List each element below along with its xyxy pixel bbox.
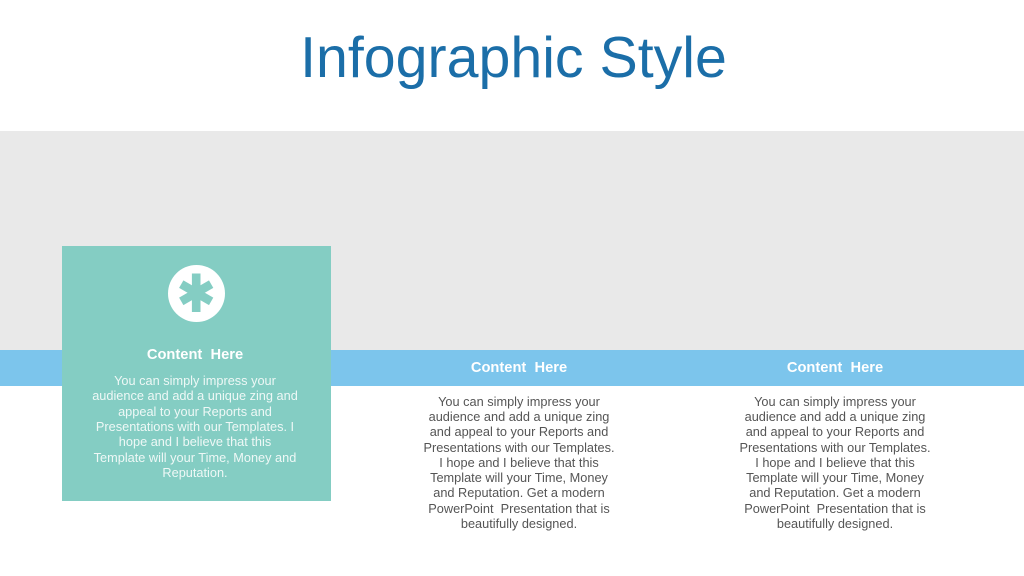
card body text: Presentations with our Templates. I [96,419,294,434]
grey background band [0,131,1024,350]
column 2 heading: Content Here [471,360,567,376]
column 2 body text: I hope and I believe that this [439,455,599,470]
column 3 body text: PowerPoint Presentation that is [744,501,926,516]
column 3 body text: and Reputation. Get a modern [749,485,921,500]
column 2 body text: You can simply impress your [438,394,600,409]
column 3 body text: You can simply impress your [754,394,916,409]
column 3 body text [739,394,931,531]
column 3 heading: Content Here [787,360,883,376]
card body text [92,373,298,480]
card body text: hope and I believe that this [119,434,271,449]
column 3 body text: Presentations with our Templates. [739,440,931,455]
column 3 body text: I hope and I believe that this [755,455,915,470]
column 2 body text: PowerPoint Presentation that is [428,501,610,516]
blue ribbon [0,350,1024,386]
card body text: Template will your Time, Money and [94,450,296,464]
column 2 body text [423,394,615,531]
column 3 body text: audience and add a unique zing [745,409,925,424]
title: Infographic Style [300,26,727,90]
card body text: audience and add a unique zing and [92,388,298,403]
card heading: Content Here [147,347,243,363]
column 2 body text: Presentations with our Templates. [423,440,615,455]
column 2 body text: and Reputation. Get a modern [433,485,605,500]
column 3 body text: and appeal to your Reports and [746,424,924,439]
column 2 body text: beautifully designed. [461,516,577,531]
column 2 body text: Template will your Time, Money [430,470,608,485]
card body text: appeal to your Reports and [118,404,272,419]
column 3 body text: Template will your Time, Money [746,470,924,485]
card body text: Reputation. [162,465,228,480]
column 2 body text: and appeal to your Reports and [430,424,608,439]
icon: asterisk in circle [168,265,225,322]
column 2 body text: audience and add a unique zing [429,409,609,424]
card body text: You can simply impress your [114,373,276,388]
panel: teal card [62,246,331,501]
column 3 body text: beautifully designed. [777,516,893,531]
